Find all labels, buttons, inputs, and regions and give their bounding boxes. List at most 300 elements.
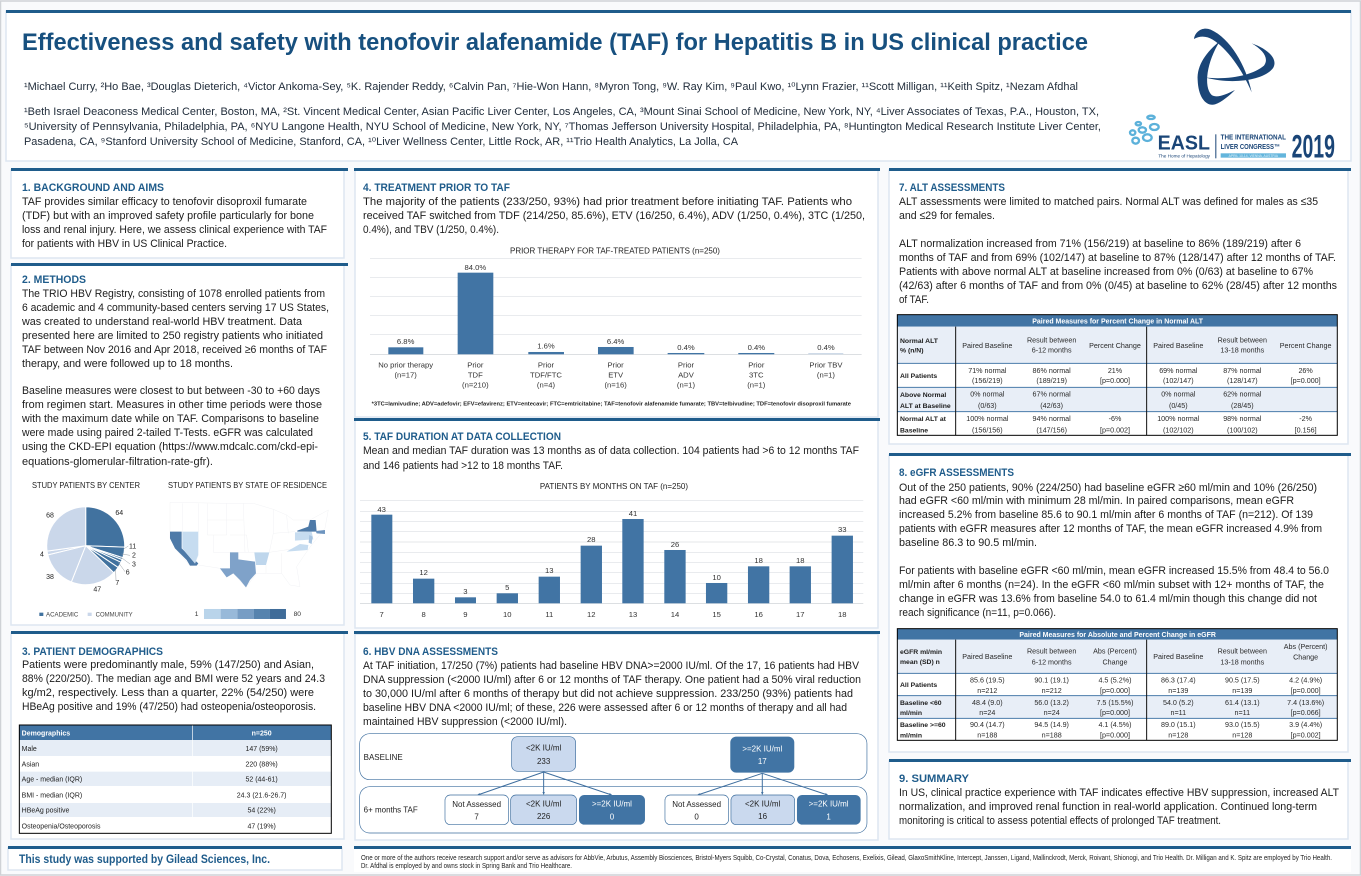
table: paired measures normal ALT: (147/156) [1036, 426, 1067, 434]
table: paired measures eGFR: n=11 [1235, 709, 1250, 717]
box: baseline above 2K [730, 737, 794, 773]
bar chart: patients by months on TAF: 16 [754, 610, 763, 619]
panel: 1. background and aims [11, 168, 348, 258]
text block: The majority of the patients (233/250, 93%) had prior treatment before initiating TAF. Patients who [363, 196, 852, 208]
box: baseline below 2K: <2K IU/ml [526, 744, 562, 753]
map: study patients by state of residence: 1 [195, 611, 199, 618]
table: paired measures normal ALT: All Patients [900, 373, 937, 380]
table: demographics: Asian [22, 762, 39, 769]
box: below 2K 226 [511, 795, 577, 825]
table: paired measures eGFR: All Patients [900, 682, 937, 689]
bar chart: prior therapy: (n=16) [604, 381, 627, 390]
logo: congress swoosh and EASL: LIVER CONGRESS™ [1221, 144, 1280, 151]
text block [21, 288, 329, 468]
table: paired measures normal ALT: Paired Baseline [962, 342, 1012, 350]
box: below 2K 16: <2K IU/ml [745, 799, 780, 808]
text block [899, 787, 1339, 827]
flow diagram: HBV DNA baseline to 6+ months [360, 734, 867, 833]
bar chart: prior therapy: 3TC [749, 370, 764, 379]
table: paired measures eGFR: n=188 [977, 732, 997, 740]
disclosure text [361, 855, 1332, 870]
title: Effectiveness and safety with tenofovir alafenamide (TAF) for Hepatitis B in US clinical practice [22, 29, 1088, 56]
table: paired measures eGFR: 3.9 (4.4%) [1289, 721, 1322, 729]
bar chart: prior therapy: Prior [748, 360, 765, 369]
table: paired measures eGFR: Change [1102, 658, 1128, 666]
bar chart: patients by months on TAF: 11 [545, 610, 553, 619]
box: not assessed 0: 0 [694, 813, 699, 822]
text block: increased 5.2% from baseline 85.6 to 90.1 ml/min after 6 months of TAF (n=212). Of 139 [899, 509, 1313, 521]
authors: ¹Michael Curry, ²Ho Bae, ³Douglas Dieterich, ⁴Victor Ankoma-Sey, ⁵K. Rajender Reddy, ⁶Calvin Pan, ⁷Hie-Won Hann, ⁸Myron Tong, ⁹W. Ray Kim, ⁹Paul Kwo, ¹⁰Lynn Frazier, ¹¹Scott Milligan, ¹¹Keith Spitz, ¹Nezam Afdhal [24, 81, 1078, 93]
panel: funding note [8, 846, 342, 870]
table: paired measures normal ALT: [p=0.000] [1291, 377, 1321, 385]
bar chart: prior therapy: 6.8% [397, 337, 415, 346]
bar chart: prior therapy: 0.4% [748, 343, 765, 352]
text block: and ≤29 for females. [899, 210, 995, 222]
table: paired measures eGFR: Paired Measures for Absolute and Percent Change in eGFR [1019, 632, 1216, 639]
box: baseline below 2K [512, 737, 576, 771]
table: paired measures eGFR: 6-12 months [1032, 658, 1072, 666]
text block [899, 482, 1329, 619]
bar chart: patients by months on TAF: 12 [419, 568, 428, 577]
box: not assessed 7 [445, 795, 509, 825]
box: below 2K 16 [731, 795, 795, 825]
bar chart: patients by months on TAF: 10 [503, 610, 512, 619]
table: paired measures eGFR: 90.4 (14.7) [970, 721, 1005, 729]
text block: monitoring is critical to assess potential effects of prolonged TAF treatment. [899, 815, 1221, 827]
text block: therapy, and were followed up to 18 months. [22, 358, 233, 370]
table: paired measures normal ALT: Paired Measures for Percent Change in Normal ALT [1032, 319, 1204, 326]
table: paired measures normal ALT: Paired Baseline [1153, 342, 1203, 350]
table: paired measures eGFR: ml/min [900, 710, 922, 717]
table: paired measures normal ALT: (28/45) [1231, 402, 1254, 410]
text block: reach significance (n=11, p=0.066). [899, 607, 1056, 619]
bar chart: patients by months on TAF: 17 [796, 610, 805, 619]
affiliations: ¹Beth Israel Deaconess Medical Center, Boston, MA, ²St. Vincent Medical Center, Asian Pacific Liver Center, Los Angeles, CA, ³Mount Sinai School of Medicine, New York, NY, ⁴Liver Associates of Texas, P.A., Houston, TX, [24, 106, 1099, 118]
map: study patients by state of residence: STUDY PATIENTS BY STATE OF RESIDENCE [168, 480, 327, 490]
box: below 2K 226: <2K IU/ml [526, 799, 562, 808]
table: paired measures eGFR: 61.4 (13.1) [1225, 699, 1260, 707]
pie chart: study patients by center: 4 [40, 551, 44, 558]
logo: congress swoosh and EASL [1130, 29, 1335, 165]
table: paired measures normal ALT: -2% [1299, 415, 1313, 423]
text block: In US, clinical practice experience with TAF indicates effective HBV suppression, increased ALT [899, 787, 1339, 799]
bar chart: patients by months on TAF: 18 [838, 610, 847, 619]
box: not assessed 0: Not Assessed [672, 800, 721, 809]
bar chart: patients by months on TAF: 14 [671, 610, 680, 619]
table: paired measures eGFR: 7.5 (15.5%) [1096, 699, 1133, 707]
heading: 1. BACKGROUND AND AIMS [22, 182, 164, 194]
bar chart: prior therapy: 84.0% [464, 263, 486, 272]
logo: congress swoosh and EASL: THE INTERNATIONAL [1221, 134, 1287, 141]
table: paired measures normal ALT: Percent Change [1089, 342, 1141, 350]
logo: congress swoosh and EASL: EASL [1158, 131, 1210, 154]
pie chart: study patients by center: 47 [93, 587, 101, 594]
table: paired measures normal ALT: (102/102) [1163, 426, 1194, 434]
table: paired measures eGFR: 54.0 (5.2) [1163, 699, 1194, 707]
table: paired measures eGFR: n=139 [1232, 687, 1252, 695]
box: not assessed 7: Not Assessed [452, 800, 501, 809]
table: paired measures normal ALT: Result between [1218, 337, 1267, 345]
table: paired measures normal ALT: 26% [1298, 367, 1313, 375]
table: demographics: 52 (44-61) [246, 777, 278, 784]
table: demographics: 147 (59%) [246, 746, 278, 753]
bar chart: patients by months on TAF: 18 [754, 556, 763, 565]
bar chart: patients by months on TAF: 9 [463, 610, 467, 619]
table: paired measures eGFR: n=212 [1042, 687, 1062, 695]
box: baseline below 2K: 233 [537, 757, 551, 766]
affiliations [24, 106, 1101, 148]
text block: At TAF initiation, 17/250 (7%) patients had baseline HBV DNA>=2000 IU/ml. Of the 17, 16 patients had HBV [363, 660, 859, 672]
text block: Patients were predominantly male, 59% (147/250) and Asian, [22, 659, 314, 671]
bar chart: prior therapy: ADV [678, 370, 695, 379]
bar chart: prior therapy: 1.6% [537, 342, 555, 351]
text block: patients with eGFR measures after 12 months of TAF, the mean eGFR increased 4.9% from [899, 523, 1322, 535]
table: paired measures eGFR: Change [1293, 653, 1318, 661]
text block: Mean and median TAF duration was 13 months as of data collection. 104 patients had >6 to 12 months TAF [363, 445, 859, 457]
bar chart: prior therapy: TDF [468, 370, 483, 379]
bar chart: prior therapy: (n=1) [677, 381, 695, 390]
table: paired measures normal ALT: Percent Change [1280, 342, 1332, 350]
table: paired measures normal ALT: Normal ALT [900, 338, 939, 345]
bar chart: patients by months on TAF: 41 [629, 509, 637, 518]
bar chart: prior therapy: Prior TBV [809, 360, 843, 369]
heading: 2. METHODS [22, 274, 86, 286]
table: paired measures normal ALT: 98% normal [1223, 415, 1262, 423]
text block: baseline 86.3 to 90.5 ml/min. [899, 537, 1037, 549]
table: paired measures eGFR: 85.6 (19.5) [970, 676, 1005, 684]
pie chart: study patients by center: STUDY PATIENTS BY CENTER [32, 480, 140, 490]
pie chart: study patients by center: ACADEMIC [46, 611, 78, 618]
table: paired measures normal ALT: (156/219) [972, 377, 1003, 385]
panel: 6. HBV DNA assessments [354, 631, 880, 840]
table: paired measures eGFR: n=212 [977, 687, 997, 695]
panel: disclosures [354, 846, 1351, 872]
table: paired measures eGFR: Paired Baseline [962, 653, 1012, 661]
table: paired measures eGFR: Baseline <60 [900, 700, 942, 707]
table: paired measures eGFR: ml/min [900, 733, 922, 740]
text block: Out of the 250 patients, 90% (224/250) had baseline eGFR ≥60 ml/min and 10% (26/250) [899, 482, 1317, 494]
text block: ALT assessments were limited to matched pairs. Normal ALT was defined for males as ≤35 [899, 196, 1318, 208]
table: paired measures normal ALT: Normal ALT at [900, 416, 947, 423]
bar chart: prior therapy: Prior [608, 360, 624, 369]
table: paired measures normal ALT: 94% normal [1033, 415, 1071, 423]
table: paired measures normal ALT: 67% normal [1033, 391, 1071, 399]
table: paired measures normal ALT [897, 315, 1337, 435]
text block: TAF between Nov 2016 and Apr 2018, received ≥6 months of TAF [22, 344, 327, 356]
funding text: This study was supported by Gilead Sciences, Inc. [19, 852, 270, 866]
text block [899, 196, 1337, 306]
text block [22, 659, 325, 713]
text block: DNA suppression (<2000 IU/ml) after 6 or 12 months of TAF therapy. One patient had a 50% viral reduction [363, 674, 861, 686]
table: paired measures eGFR: Abs (Percent) [1093, 648, 1137, 656]
bar chart: patients by months on TAF: PATIENTS BY MONTHS ON TAF (n=250) [540, 482, 688, 491]
table: paired measures normal ALT: 71% normal [968, 367, 1007, 375]
box: below 2K 226: 226 [537, 812, 551, 821]
box: baseline above 2K: 17 [758, 757, 767, 766]
table: paired measures eGFR: 4.2 (4.9%) [1289, 676, 1322, 684]
table: paired measures eGFR: eGFR ml/min [900, 649, 942, 656]
table: paired measures normal ALT: 13-18 months [1220, 347, 1265, 355]
box: above 2K 0: >=2K IU/ml [592, 799, 632, 808]
text block: were made using paired 2-tailed T-Tests. eGFR was calculated [21, 427, 313, 439]
table: paired measures eGFR: n=139 [1168, 687, 1188, 695]
table: paired measures normal ALT: 86% normal [1033, 367, 1071, 375]
table: demographics: Osteopenia/Osteoporosis [22, 823, 101, 830]
table: paired measures normal ALT: 62% normal [1223, 391, 1262, 399]
table: paired measures normal ALT: 21% [1108, 367, 1123, 375]
table: demographics: 220 (88%) [246, 762, 278, 769]
bar chart: patients by months on TAF [360, 482, 863, 619]
table: paired measures normal ALT: (102/147) [1163, 377, 1194, 385]
bar chart: prior therapy: TDF/FTC [530, 370, 562, 379]
heading: 5. TAF DURATION AT DATA COLLECTION [363, 431, 561, 443]
bar chart: prior therapy: (n=1) [817, 371, 835, 380]
text block: for patients with HBV in US Clinical Practice. [22, 238, 227, 250]
heading: 6. HBV DNA ASSESSMENTS [363, 646, 498, 658]
bar chart: prior therapy: ETV [608, 370, 624, 379]
table: paired measures normal ALT: [0.156] [1295, 426, 1317, 434]
table: paired measures eGFR: [p=0.000] [1291, 687, 1321, 695]
text block [363, 445, 859, 472]
bar chart: patients by months on TAF: 13 [545, 566, 554, 575]
table: paired measures eGFR: n=188 [1042, 732, 1062, 740]
bar chart: patients by months on TAF: 15 [712, 610, 721, 619]
bar chart: prior therapy: 6.4% [607, 337, 625, 346]
table: paired measures eGFR: 13-18 months [1220, 658, 1265, 666]
table: paired measures eGFR: 93.0 (15.5) [1225, 721, 1260, 729]
text block: maintained HBV suppression (<2000 IU/ml). [363, 716, 567, 728]
bar chart: patients by months on TAF: 10 [712, 573, 721, 582]
box: not assessed 7: 7 [474, 813, 479, 822]
affiliations: ⁵University of Pennsylvania, Philadelphia, PA, ⁶NYU Langone Health, NYU School of Medicine, New York, NY, ⁷Thomas Jefferson University Hospital, Philadelphia, PA, ⁸Huntington Medical Research Institute Liver Center, [24, 121, 1101, 133]
bar chart: prior therapy: 0.4% [677, 343, 695, 352]
bar chart: prior therapy: No prior therapy [378, 360, 433, 369]
box: above 2K 1: >=2K IU/ml [809, 799, 849, 808]
text block: TAF provides similar efficacy to tenofovir disoproxil fumarate [22, 196, 307, 208]
bar chart: prior therapy: Prior [678, 360, 694, 369]
table: paired measures normal ALT: (156/156) [972, 426, 1003, 434]
bar chart: prior therapy: (n=1) [747, 381, 766, 390]
box: above 2K 1: 1 [826, 813, 831, 822]
bar chart: patients by months on TAF: 13 [629, 610, 637, 619]
table: paired measures normal ALT: (128/147) [1227, 377, 1258, 385]
bar chart: patients by months on TAF: 26 [671, 540, 679, 549]
text block: of TAF. [899, 294, 929, 306]
text block: HBeAg positive and 19% (47/250) had osteopenia/osteoporosis. [22, 701, 316, 713]
text block: 0.4%), and TBV (1/250, 0.4%). [363, 224, 499, 236]
table: demographics: n=250 [252, 731, 272, 738]
text block: Patients with above normal ALT at baseline increased from 0% (0/63) at baseline to 67% [899, 266, 1313, 278]
text block: months of TAF and from 69% (102/147) at baseline to 87% (128/147) after 12 months of TAF. [899, 252, 1336, 264]
table: demographics [19, 725, 331, 833]
box: above 2K 0: 0 [610, 813, 615, 822]
bar chart: patients by months on TAF: 8 [422, 610, 426, 619]
table: paired measures normal ALT: 100% normal [1157, 415, 1200, 423]
text block: kg/m2, respectively. Less than a quarter, 22% (54/250) were [22, 687, 314, 699]
panel: 2. methods [11, 263, 348, 625]
map: study patients by state of residence: 80 [294, 611, 301, 618]
table: demographics: 47 (19%) [247, 823, 276, 830]
table: paired measures eGFR: Paired Baseline [1153, 653, 1203, 661]
logo: congress swoosh and EASL: The Home of Hepatology [1158, 153, 1211, 158]
bar chart: prior therapy: Prior [538, 360, 555, 369]
text block: For patients with baseline eGFR <60 ml/min, mean eGFR increased 15.5% from 48.4 to 56.0 [899, 565, 1329, 577]
pie chart: study patients by center: 11 [129, 543, 136, 550]
table: paired measures normal ALT: (0/45) [1169, 402, 1188, 410]
text block: normalization, and improved renal function in real-world application. Continued long-term [899, 801, 1317, 813]
panel: 7. ALT assessments [889, 168, 1351, 444]
bar chart: patients by months on TAF: 7 [380, 610, 384, 619]
table: paired measures eGFR: 48.4 (9.0) [972, 699, 1003, 707]
heading: 7. ALT ASSESSMENTS [899, 182, 1005, 194]
text block: ALT normalization increased from 71% (156/219) at baseline to 86% (189/219) after 6 [899, 238, 1301, 250]
table: paired measures eGFR: Result between [1218, 648, 1267, 656]
text block: to 30,000 IU/ml after 6 months of therapy but did not achieve suppression. 233/250 (93%) patients had [363, 688, 853, 700]
table: paired measures eGFR: 4.1 (4.5%) [1098, 721, 1131, 729]
table: paired measures normal ALT: Above Normal [900, 392, 946, 399]
table: paired measures eGFR: 90.1 (19.1) [1034, 676, 1069, 684]
table: paired measures eGFR: 56.0 (13.2) [1034, 699, 1069, 707]
text block: Baseline measures were closest to but between -30 to +60 days [22, 385, 320, 397]
bar chart: patients by months on TAF: 33 [838, 525, 847, 534]
pie chart: study patients by center: 6 [126, 570, 130, 577]
table: paired measures eGFR: n=24 [979, 709, 995, 717]
heading: 9. SUMMARY [899, 773, 970, 785]
pie chart: study patients by center: 64 [115, 510, 123, 517]
bar chart: prior therapy: (n=4) [537, 381, 555, 390]
bar chart: patients by months on TAF: 28 [587, 535, 596, 544]
table: paired measures eGFR: mean (SD) n [900, 659, 940, 666]
bar chart: prior therapy: *3TC=lamivudine; ADV=adefovir; EFV=efavirenz; ETV=entecavir; FTC=emtricitabine; TAF=tenofovir alafenamide fumarate; TBV=telbivudine; TDF=tenofovir disoproxil fumarate [372, 401, 851, 407]
table: paired measures eGFR: n=128 [1168, 732, 1188, 740]
text block: ml/min after 6 months (n=24). In the eGFR <60 ml/min subset with 12+ months of TAF, the [899, 579, 1324, 591]
pie chart: study patients by center: 7 [115, 580, 119, 587]
text block: presented here are limited to 250 registry patients who initiated [22, 330, 323, 342]
flow diagram: HBV DNA baseline to 6+ months: 6+ months TAF [364, 806, 418, 815]
panel: 9. summary [889, 759, 1351, 839]
bar chart: patients by months on TAF: 5 [505, 583, 509, 592]
table: paired measures normal ALT: ALT at Baseline [900, 403, 951, 410]
table: paired measures eGFR: [p=0.002] [1291, 732, 1321, 740]
table: paired measures normal ALT: -6% [1109, 415, 1122, 423]
table: paired measures normal ALT: 87% normal [1223, 367, 1262, 375]
pie chart: study patients by center: 2 [132, 552, 136, 559]
table: paired measures eGFR: n=11 [1171, 709, 1186, 717]
table: paired measures normal ALT: [p=0.000] [1100, 377, 1130, 385]
table: paired measures normal ALT: 0% normal [970, 391, 1005, 399]
pie chart: study patients by center: 68 [46, 513, 54, 520]
table: paired measures eGFR: [p=0.066] [1291, 709, 1321, 717]
bar chart: patients by months on TAF: 12 [587, 610, 596, 619]
bar chart: prior therapy [370, 247, 862, 407]
table: paired measures eGFR: Abs (Percent) [1284, 643, 1328, 651]
box: baseline above 2K: >=2K IU/ml [742, 745, 782, 754]
table: paired measures eGFR: Result between [1027, 648, 1076, 656]
table: paired measures eGFR: [p=0.000] [1100, 709, 1130, 717]
text block: with the maximum date while on TAF. Comparisons to baseline [21, 413, 319, 425]
table: demographics: 24.3 (21.6-26.7) [237, 793, 286, 800]
table: paired measures normal ALT: (0/63) [978, 402, 997, 410]
pie chart: study patients by center: 3 [132, 562, 136, 569]
panel: 5. TAF duration [354, 418, 880, 628]
bar chart: prior therapy: (n=210) [462, 381, 489, 390]
table: paired measures eGFR: n=128 [1232, 732, 1252, 740]
bar chart: prior therapy: PRIOR THERAPY FOR TAF-TREATED PATIENTS (n=250) [510, 247, 720, 256]
table: paired measures eGFR: 7.4 (13.6%) [1287, 699, 1324, 707]
bar chart: patients by months on TAF: 3 [463, 587, 467, 596]
text block: received TAF switched from TDF (214/250, 85.6%), ETV (16/250, 6.4%), ADV (1/250, 0.4%), 3TC (1/250, [363, 210, 865, 222]
table: paired measures eGFR: 89.0 (15.1) [1161, 721, 1196, 729]
table: demographics: Age - median (IQR) [22, 777, 82, 784]
table: demographics: 54 (22%) [247, 808, 276, 815]
table: paired measures normal ALT: (100/102) [1227, 426, 1258, 434]
table: demographics: Male [22, 746, 37, 753]
text block: 88% (220/250). The median age and BMI were 52 years and 24.3 [22, 673, 325, 685]
text block: change in eGFR was 13.6% from baseline 54.0 to 61.4 ml/min though this change did not [899, 593, 1318, 605]
table: paired measures eGFR: 90.5 (17.5) [1225, 676, 1260, 684]
table: paired measures eGFR: [p=0.000] [1100, 687, 1130, 695]
table: paired measures normal ALT: % (n/N) [900, 348, 924, 355]
table: paired measures normal ALT: Baseline [900, 427, 928, 434]
text block [363, 660, 861, 728]
text block: using the CKD-EPI equation (https://www.mdcalc.com/ckd-epi- [22, 441, 318, 453]
affiliations: Pasadena, CA, ⁹Stanford University School of Medicine, Stanford, CA, ¹⁰Liver Wellness Center, Little Rock, AR, ¹¹Trio Health Analytics, La Jolla, CA [24, 136, 739, 148]
table: paired measures normal ALT: (42/63) [1040, 402, 1063, 410]
text block: baseline HBV DNA <2000 IU/ml; of these, 226 were assessed after 6 or 12 months of therapy and all had [363, 702, 847, 714]
box: above 2K 0 [579, 795, 645, 825]
pie chart: study patients by center: 38 [46, 574, 54, 581]
table: paired measures normal ALT: [p=0.002] [1100, 426, 1130, 434]
logo: congress swoosh and EASL: APRIL 10-14, VIENNA, AUSTRIA [1229, 154, 1279, 158]
flow diagram: HBV DNA baseline to 6+ months: BASELINE [364, 753, 403, 762]
table: paired measures eGFR: 4.5 (5.2%) [1098, 676, 1131, 684]
heading: 8. eGFR ASSESSMENTS [899, 467, 1014, 479]
heading: 4. TREATMENT PRIOR TO TAF [363, 182, 510, 194]
panel: 8. eGFR assessments [889, 453, 1351, 752]
table: paired measures eGFR: n=24 [1044, 709, 1060, 717]
pie chart: study patients by center [32, 480, 140, 618]
text block: loss and renal injury. Here, we assess clinical experience with TAF [22, 224, 327, 236]
table: paired measures normal ALT: 0% normal [1161, 391, 1196, 399]
table: demographics: BMI - median (IQR) [22, 793, 82, 800]
heading: 3. PATIENT DEMOGRAPHICS [22, 646, 163, 658]
text block: from regimen start. Measures in other time periods were those [22, 399, 322, 411]
table: paired measures normal ALT: 6-12 months [1032, 347, 1072, 355]
box: below 2K 16: 16 [758, 812, 768, 821]
table: demographics: HBeAg positive [22, 808, 70, 815]
text block: equations-glomerular-filtration-rate-gfr). [22, 456, 213, 468]
panel: header [6, 10, 1351, 165]
text block [22, 196, 327, 250]
text block: 6 academic and 4 community-based centers serving 17 US States, [22, 302, 329, 314]
table: demographics: Demographics [22, 731, 70, 738]
table: paired measures normal ALT: Result between [1027, 337, 1076, 345]
map: study patients by state of residence [168, 480, 328, 619]
bar chart: prior therapy: 0.4% [817, 343, 835, 352]
panel: 4. treatment prior to TAF [354, 168, 880, 417]
box: not assessed 0 [665, 795, 729, 825]
text block: was created to understand real-world HBV treatment. Data [21, 316, 303, 328]
disclosure text: Dr. Afdhal is employed by and owns stock in Spring Bank and Trio Healthcare. [361, 863, 572, 870]
bar chart: patients by months on TAF: 18 [796, 556, 805, 565]
table: paired measures normal ALT: (189/219) [1036, 377, 1067, 385]
table: paired measures eGFR: 86.3 (17.4) [1161, 676, 1196, 684]
table: paired measures eGFR: Baseline >=60 [900, 722, 946, 729]
bar chart: patients by months on TAF: 43 [377, 505, 386, 514]
table: paired measures normal ALT: 100% normal [966, 415, 1009, 423]
text block: (TDF) but with an improved safety profile particularly for bone [22, 210, 314, 222]
table: paired measures eGFR [897, 629, 1337, 740]
